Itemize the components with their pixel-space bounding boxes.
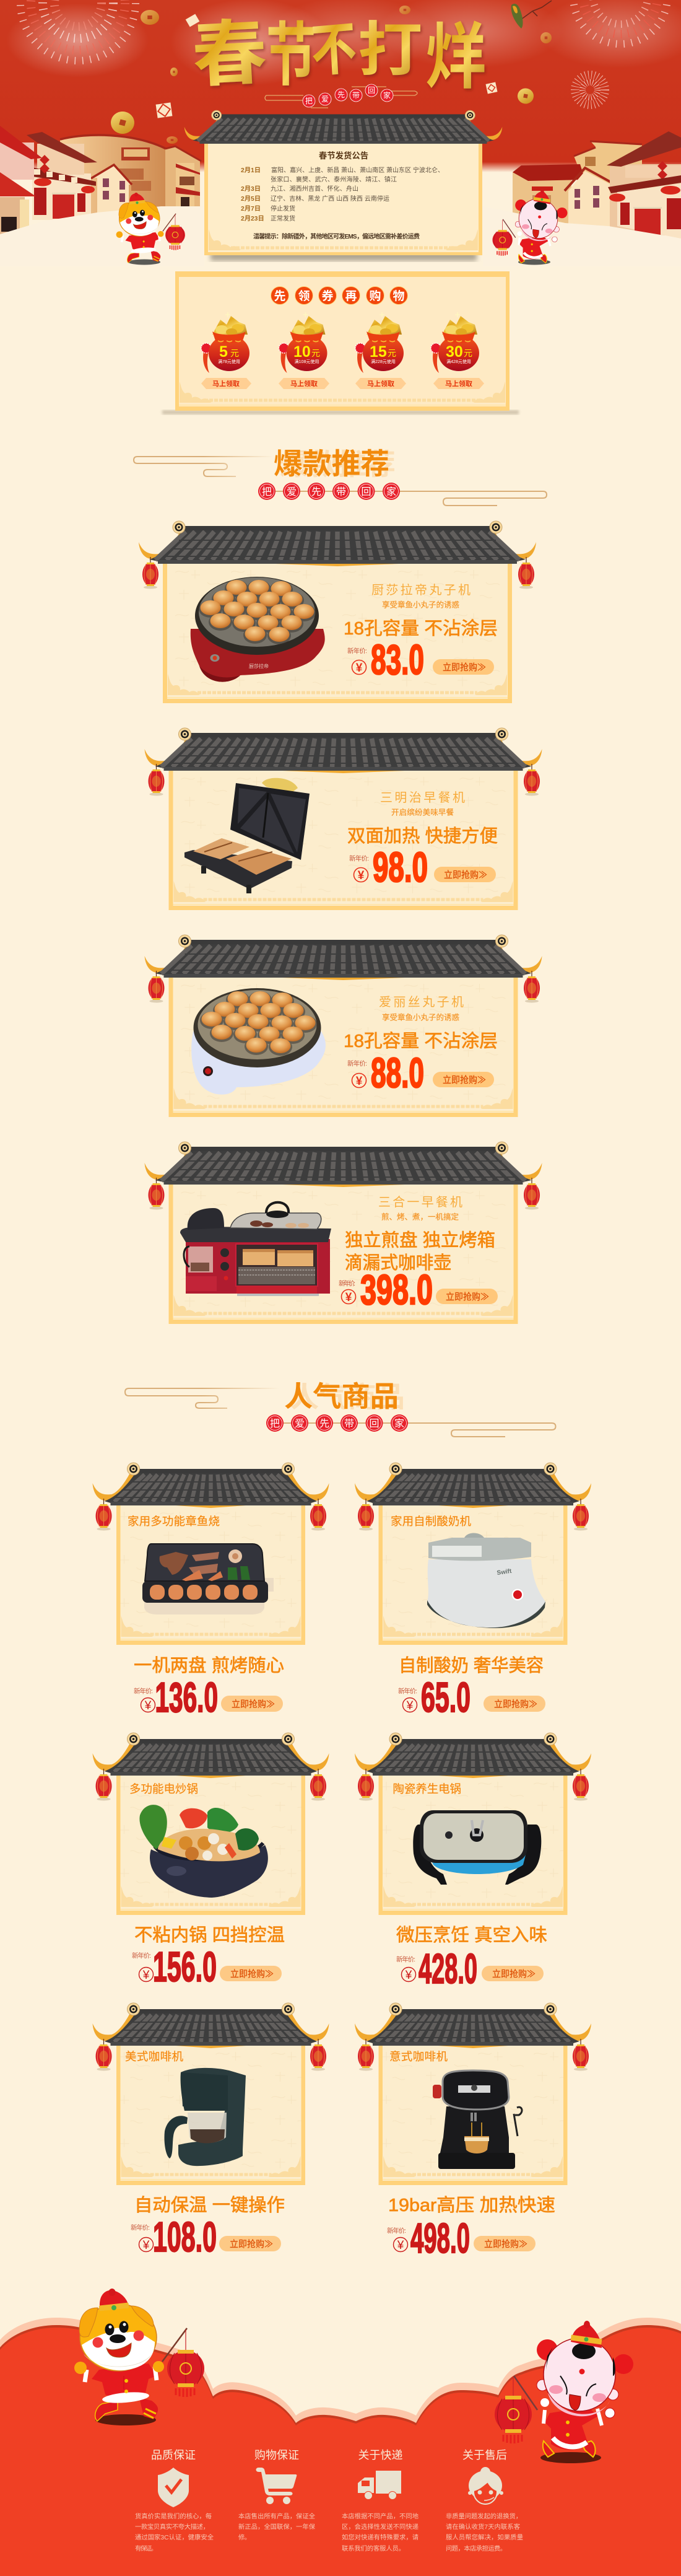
section heading: popular goods <box>125 1380 556 1437</box>
buy button: 立即抢购≫ <box>492 1968 536 1979</box>
notice rows: 2月23日 <box>241 215 264 222</box>
section heading: popular goods: 爱 <box>295 1418 305 1429</box>
section heading: hot picks: 先 <box>311 486 321 497</box>
footer wave <box>0 2318 681 2576</box>
coupon 5: 满78元使用 <box>218 359 240 364</box>
section heading: hot picks: 爆款推荐 <box>274 447 389 480</box>
product card: espresso machine <box>355 2003 591 2262</box>
notice rows <box>241 166 444 222</box>
coupon 10 <box>279 312 329 389</box>
coupon 5: 元 <box>230 348 239 358</box>
coupon 5 <box>201 312 251 389</box>
product card: takoyaki maker white <box>145 935 542 1117</box>
coupon 10: 10 <box>293 343 311 361</box>
product image <box>139 1805 268 1898</box>
price <box>141 1674 218 1721</box>
buy button <box>221 1696 283 1712</box>
buy button <box>219 2236 281 2251</box>
price: 156.0 <box>153 1943 217 1991</box>
product text: 爱丽丝丸子机 <box>379 995 464 1009</box>
coupon 30: 30 <box>446 343 463 361</box>
price: 88.0 <box>371 1049 424 1097</box>
price: ¥ <box>397 2239 404 2252</box>
coupon 10: 马上领取 <box>290 379 318 388</box>
price <box>352 636 424 683</box>
product card: ceramic cooker: 陶瓷养生电锅 <box>393 1782 461 1795</box>
subtitle badges: 先 <box>337 90 345 99</box>
product card: takoyaki maker red <box>139 521 536 703</box>
price: ¥ <box>358 869 365 882</box>
product card: espresso machine: 意式咖啡机 <box>389 2050 448 2063</box>
product card: sandwich maker: 新年价: <box>349 854 369 862</box>
guarantee: quality: 通过国家3C认证，健康安全 <box>135 2533 214 2541</box>
price: 428.0 <box>419 1945 477 1992</box>
product card: takoyaki maker white: 享受章鱼小丸子的诱惑 <box>382 1012 459 1022</box>
coupon heading: 再 <box>345 290 357 303</box>
buy button: 立即抢购≫ <box>494 1699 537 1710</box>
product image <box>433 2070 522 2169</box>
guarantee: after sales: 服人员帮您解决，如果质量 <box>446 2533 523 2541</box>
guarantee: shopping: 本店售出所有产品，保证全 <box>238 2512 316 2520</box>
product card: espresso machine: 新年价: <box>387 2227 406 2235</box>
product text: 厨莎拉帝丸子机 <box>371 583 471 597</box>
coupon heading: 购 <box>369 289 381 303</box>
notice heading: 春节发货公告 <box>319 151 368 160</box>
title: 不 <box>310 16 358 84</box>
guarantee: delivery: 本店根据不同产品，不同地 <box>342 2512 419 2520</box>
section heading: popular goods: 带 <box>344 1418 354 1429</box>
product image <box>427 1533 545 1628</box>
price: ¥ <box>356 662 363 675</box>
buy button <box>474 2236 536 2251</box>
section heading: hot picks: 家 <box>386 486 396 497</box>
price <box>342 1266 433 1313</box>
coupon 15: 满228元使用 <box>371 359 396 364</box>
guarantee: quality <box>135 2449 214 2552</box>
product card: drip coffee maker <box>93 2003 329 2261</box>
footer panel <box>0 2289 681 2576</box>
product card: breakfast machine: 新年价: <box>339 1279 355 1287</box>
guarantee: after sales: 问题，本店承担运费。 <box>446 2544 506 2552</box>
product image: Swift <box>497 1568 513 1577</box>
title: 烊 <box>425 17 486 97</box>
subtitle badges: 家 <box>383 90 391 100</box>
product card: drip coffee maker: 自动保温 一键操作 <box>134 2195 285 2215</box>
product text: 三合一早餐机 <box>378 1195 462 1209</box>
title <box>190 12 486 97</box>
product card: sandwich maker: 开启缤纷美味早餐 <box>391 808 454 817</box>
product card: electric wok: 多功能电炒锅 <box>129 1782 198 1795</box>
coupon 10: 满108元使用 <box>295 359 319 364</box>
price <box>402 1674 471 1721</box>
buy button: 立即抢购≫ <box>230 2238 273 2250</box>
red sky <box>0 0 681 172</box>
product image <box>413 1810 541 1885</box>
product card: electric wok: 新年价: <box>132 1952 151 1960</box>
notice tip: 温馨提示：除新疆外，其他地区可发EMS，偏远地区需补差价运费 <box>253 232 420 240</box>
section heading: popular goods: 人气商品 <box>290 1381 405 1413</box>
header dog mascot <box>116 193 185 263</box>
price: ¥ <box>144 1699 152 1712</box>
subtitle badges: 爱 <box>321 95 329 103</box>
buy button <box>433 659 494 675</box>
price: 83.0 <box>371 636 424 683</box>
coupon 15 <box>355 312 406 389</box>
right town <box>483 131 681 266</box>
guarantee: quality: 有保证。 <box>135 2544 157 2552</box>
notice rows: 2月7日 <box>241 205 261 212</box>
guarantee: delivery: 关于快递 <box>358 2449 402 2461</box>
header doll mascot <box>492 190 567 263</box>
price: ¥ <box>345 1291 352 1304</box>
coins <box>108 109 137 136</box>
section heading: hot picks: 带 <box>336 486 346 497</box>
buy button: 立即抢购≫ <box>230 1968 274 1979</box>
subtitle badges: 带 <box>352 91 360 100</box>
title: 春 <box>190 12 269 95</box>
product card: griddle: 新年价: <box>134 1687 153 1695</box>
product image <box>191 988 326 1095</box>
product card: ceramic cooker: 新年价: <box>396 1955 415 1963</box>
buy button: 立即抢购≫ <box>232 1699 275 1710</box>
product card: yogurt maker: 家用自制酸奶机 <box>391 1515 471 1528</box>
guarantee: shopping: 购物保证 <box>254 2449 299 2461</box>
buy button <box>433 1072 494 1087</box>
guarantee: quality: 货真价实是我们的核心，每 <box>135 2512 212 2520</box>
guarantee: after sales: 关于售后 <box>462 2449 507 2461</box>
product image <box>184 778 310 893</box>
buy button: 立即抢购≫ <box>443 1074 486 1085</box>
footer doll mascot <box>495 2321 633 2457</box>
fireworks <box>20 0 667 105</box>
product card: espresso machine: 19bar高压 加热快速 <box>388 2195 555 2215</box>
subtitle badges <box>265 84 417 108</box>
product text: 三明治早餐机 <box>380 791 465 805</box>
product image <box>164 2068 246 2166</box>
coupon 15: 马上领取 <box>367 379 394 388</box>
buy button: 立即抢购≫ <box>484 2238 527 2250</box>
product card: takoyaki maker red: 享受章鱼小丸子的诱惑 <box>382 600 459 610</box>
guarantee: delivery: 区，会选择性发送不同快递 <box>342 2523 419 2531</box>
product card: electric wok: 不粘内锅 四挡控温 <box>134 1925 285 1945</box>
coupon 5: 5 <box>219 343 228 361</box>
product card: ceramic cooker <box>355 1733 591 1992</box>
section heading: popular goods: 人气商品 <box>284 1380 399 1413</box>
price: 65.0 <box>421 1674 471 1721</box>
product card: sandwich maker <box>145 728 542 910</box>
red packets <box>156 14 497 118</box>
buy button: 立即抢购≫ <box>446 1291 489 1302</box>
coupon 30: 满428元使用 <box>446 359 471 364</box>
price <box>139 1943 217 1991</box>
notice rows: 辽宁、吉林、黑龙 广西 山西 陕西 云南停运 <box>271 195 389 203</box>
product card: drip coffee maker: 新年价: <box>131 2223 150 2232</box>
coupon 30 <box>431 312 484 389</box>
product card: griddle: 一机两盘 煎烤随心 <box>134 1655 284 1676</box>
price: 498.0 <box>410 2215 470 2262</box>
section heading: hot picks: 把 <box>262 486 272 497</box>
coupon 15: 15 <box>370 343 387 361</box>
coupon 5: 马上领取 <box>212 379 240 388</box>
guarantee: after sales: 非质量问题发起的退换货， <box>446 2512 522 2520</box>
price: 398.0 <box>360 1266 433 1313</box>
price: ¥ <box>142 1969 150 1982</box>
guarantee: delivery: 联系我们的客服人员。 <box>342 2544 405 2552</box>
notice rows: 九江、湘西州吉首、怀化、舟山 <box>271 185 358 193</box>
product card: electric wok <box>93 1733 329 1991</box>
section heading: hot picks: 回 <box>361 487 371 497</box>
coupon 30: 马上领取 <box>445 379 472 388</box>
guarantee: shopping: 新正品，全国联保，一年保 <box>238 2523 316 2531</box>
footer dog mascot <box>74 2289 204 2421</box>
price <box>394 2215 470 2262</box>
notice rows: 停止发货 <box>271 204 295 212</box>
coupon heading: 物 <box>393 289 405 303</box>
notice rows: 2月1日 <box>241 167 261 174</box>
guarantee: shopping: 修。 <box>238 2533 251 2541</box>
header banner <box>0 0 681 266</box>
buy button: 立即抢购≫ <box>444 869 487 880</box>
section heading: hot picks: 爱 <box>287 486 297 497</box>
coupon 30: 元 <box>464 348 472 358</box>
coupon heading: 领 <box>298 289 310 303</box>
guarantee: quality: 品质保证 <box>151 2449 196 2461</box>
product card: drip coffee maker: 美式咖啡机 <box>125 2050 183 2063</box>
guarantee: quality: 一款宝贝真实不夸大描述， <box>135 2523 209 2531</box>
product image: 厨莎拉帝 <box>249 663 269 669</box>
coupon heading <box>271 286 407 305</box>
buy button: 立即抢购≫ <box>443 662 486 673</box>
buy button <box>482 1966 544 1981</box>
section heading: hot picks: 爆款推荐 <box>280 448 396 481</box>
product card: yogurt maker <box>355 1463 591 1721</box>
product image <box>180 1203 331 1296</box>
product card: yogurt maker: 新年价: <box>398 1687 417 1695</box>
buy button <box>434 867 496 882</box>
price <box>401 1945 477 1992</box>
notice rows: 正常发货 <box>271 214 295 222</box>
price <box>352 1049 424 1097</box>
product card: takoyaki maker red: 18孔容量 不沾涂层 <box>344 618 498 639</box>
guarantee: shopping <box>238 2449 316 2541</box>
mascot shadows <box>128 259 550 265</box>
price: 98.0 <box>373 844 428 891</box>
notice rows: 2月3日 <box>241 185 261 193</box>
price <box>354 844 428 891</box>
product image <box>191 577 325 682</box>
section heading: popular goods: 回 <box>369 1419 380 1429</box>
price: ¥ <box>142 2239 150 2252</box>
coupon 15: 元 <box>388 348 396 358</box>
price <box>139 2214 217 2261</box>
price: 136.0 <box>155 1674 218 1721</box>
guarantee: delivery <box>342 2449 419 2552</box>
price: 108.0 <box>153 2214 217 2261</box>
section heading: hot picks <box>134 447 547 506</box>
notice rows: 张家口、襄樊、武穴、泰州海陵、靖江、镇江 <box>271 175 397 183</box>
product card: breakfast machine: 独立煎盘 独立烤箱 <box>345 1230 495 1250</box>
product card: griddle: 家用多功能章鱼烧 <box>128 1515 220 1528</box>
title: 节 <box>266 17 316 94</box>
price: ¥ <box>405 1969 412 1982</box>
guarantee: delivery: 如您对快递有特殊要求，请 <box>342 2533 419 2541</box>
panel: coupons <box>162 271 519 414</box>
notice rows: 2月5日 <box>241 195 261 203</box>
price: ¥ <box>406 1699 414 1712</box>
price: ¥ <box>356 1075 363 1088</box>
buy button <box>436 1289 498 1304</box>
subtitle badges: 回 <box>368 86 375 95</box>
bird on branch <box>511 1 552 28</box>
product card: yogurt maker: 自制酸奶 奢华美容 <box>399 1655 544 1676</box>
section heading: popular goods: 家 <box>394 1418 404 1429</box>
section heading: popular goods: 先 <box>319 1418 329 1429</box>
product card: breakfast machine: 滴漏式咖啡壶 <box>345 1253 451 1273</box>
product card: breakfast machine <box>145 1142 542 1324</box>
product card: sandwich maker: 双面加热 快捷方便 <box>347 826 498 846</box>
panel: shipping notice <box>184 110 502 261</box>
product card: ceramic cooker: 微压烹饪 真空入味 <box>396 1925 547 1945</box>
product image <box>142 1544 274 1614</box>
notice rows: 富阳、嘉兴、上虞、新昌 萧山、萧山南区 萧山东区 宁波北仑、 <box>271 166 444 174</box>
buy button <box>220 1966 282 1981</box>
product card: takoyaki maker white: 18孔容量 不沾涂层 <box>344 1031 498 1051</box>
section heading: popular goods: 把 <box>270 1418 280 1429</box>
product card: breakfast machine: 煎、烤、煮，一机搞定 <box>381 1212 459 1222</box>
guarantee: after sales: 请在确认收货7天内联系客 <box>446 2523 520 2531</box>
title: 打 <box>358 17 422 83</box>
buy button <box>484 1696 545 1712</box>
product card: takoyaki maker red: 新年价: <box>347 647 367 655</box>
coupon heading: 券 <box>321 289 334 303</box>
coupon 10: 元 <box>311 348 320 358</box>
subtitle badges: 把 <box>305 97 313 105</box>
left town <box>0 126 204 266</box>
coupon heading: 先 <box>274 289 286 303</box>
product card: griddle <box>93 1463 329 1721</box>
guarantee: after sales <box>446 2449 523 2552</box>
product card: takoyaki maker white: 新年价: <box>347 1059 367 1067</box>
